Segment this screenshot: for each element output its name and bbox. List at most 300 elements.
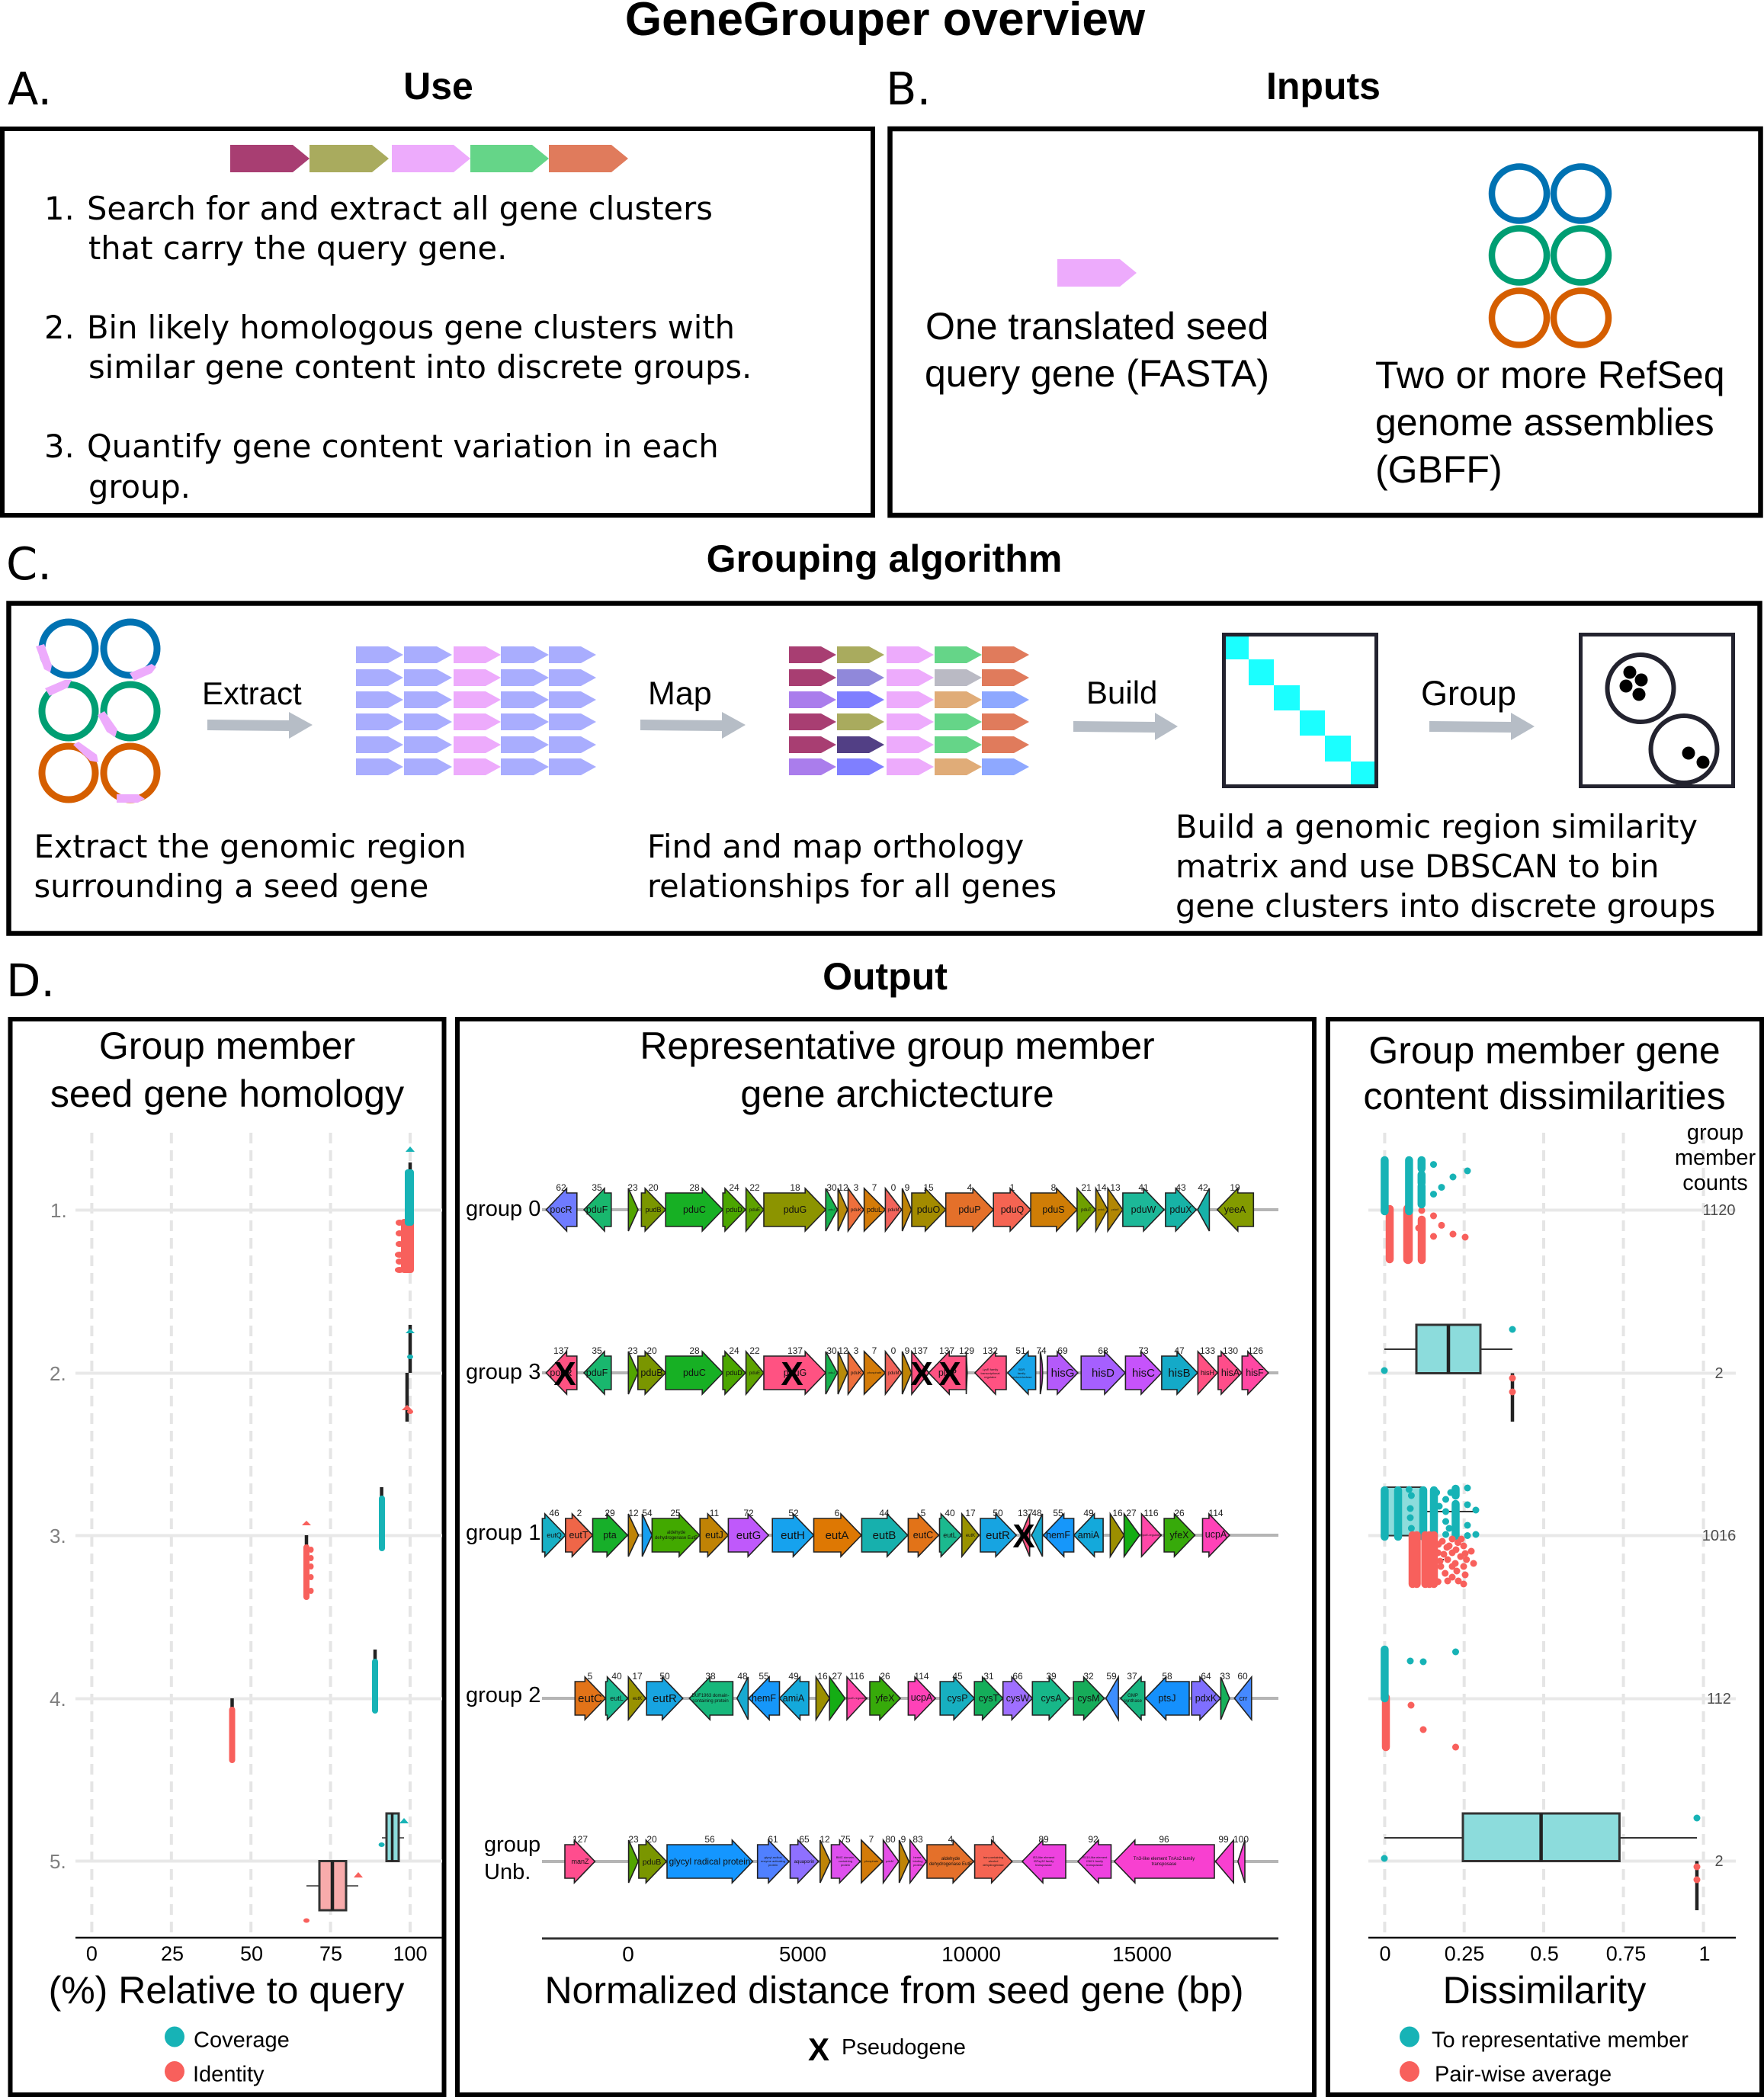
track: group Unb.: transposase [1035, 1863, 1053, 1867]
track: group 2: group 2 [466, 1683, 540, 1707]
track: group 1: eutH [781, 1529, 805, 1542]
track: group 0: 42 [1198, 1182, 1208, 1193]
panel letter C: C. [6, 537, 52, 590]
track: group 3: 0 [891, 1345, 896, 1356]
x axis [542, 1938, 1278, 1966]
panel frame [1328, 1019, 1762, 2095]
y axis labels: 4. [50, 1688, 66, 1711]
track: group 3: hisH [1201, 1369, 1214, 1377]
track: group 0: pduJ [829, 1207, 835, 1211]
track: group 2: eutK [633, 1697, 642, 1701]
track: group 3: pduC [683, 1368, 706, 1378]
track: group 1: 29 [605, 1508, 615, 1518]
track: group 1: eutL [943, 1531, 957, 1539]
gene grid: mapped [789, 646, 1029, 775]
group member counts heading: member [1675, 1146, 1756, 1170]
pseudogene marker: X [1012, 1518, 1035, 1555]
genome assemblies text: (GBFF) [1375, 448, 1503, 491]
track: group Unb.: 7 [869, 1834, 874, 1845]
track: group Unb.: transposase [1152, 1862, 1177, 1867]
track: group 0: 1 [1010, 1182, 1015, 1193]
track: group 2: cysA [1041, 1693, 1062, 1704]
track: group 2: ucpA [911, 1692, 933, 1703]
track: group 1: pta [603, 1530, 617, 1541]
icon: seed gene arrow [1057, 259, 1137, 287]
track: group 2: crr [1240, 1695, 1247, 1702]
track: group 0: pduV [1111, 1207, 1119, 1211]
panel title: gene archictecture [740, 1073, 1054, 1115]
y axis labels: 2. [50, 1362, 66, 1385]
track: group 3: 132 [983, 1345, 998, 1356]
track: group 1: 27 [1126, 1508, 1137, 1518]
track: group 0: 4 [967, 1182, 973, 1193]
track: group 0: 30 [826, 1182, 837, 1193]
track: group 3: hisA [1221, 1368, 1240, 1378]
track: group 3: LysR family [983, 1368, 998, 1371]
track: group Unb.: IS621 family [1086, 1859, 1103, 1863]
track: group 0: pduQ [1001, 1204, 1025, 1215]
track: group 2: 31 [983, 1671, 994, 1682]
track: group 2: 116 [849, 1671, 864, 1682]
track: group 0: 20 [648, 1182, 659, 1193]
track: group 3: 137 [912, 1345, 928, 1356]
track: group 1: 25 [670, 1508, 681, 1518]
steps text: similar gene content into discrete groups. [88, 348, 752, 386]
track: group Unb.: 96 [1159, 1834, 1169, 1845]
track: group 0: group 0 [466, 1197, 540, 1221]
track: group 3: hisD [1092, 1367, 1115, 1380]
track: group 0: pduM [887, 1208, 900, 1213]
track: group 3: 9 [905, 1345, 910, 1356]
track: group 3: 73 [1138, 1345, 1149, 1356]
x axis: 15000 [1112, 1942, 1172, 1966]
caption: build and group [1175, 808, 1715, 925]
track: group Unb.: protein [913, 1863, 922, 1867]
track: group 0: 12 [838, 1182, 848, 1193]
track: group 1: 12 [628, 1508, 639, 1518]
heading: Grouping algorithm: Grouping algorithm [707, 537, 1062, 580]
track: group 1: group 1 [466, 1521, 540, 1545]
track: group Unb.: IS3-like element [1033, 1855, 1055, 1859]
track: group 2: 38 [705, 1671, 716, 1682]
dissimilarity data: group 1 [1384, 1160, 1471, 1260]
panel B: inputs [886, 63, 1761, 515]
caption: map: Find and map orthology [647, 828, 1024, 865]
track: group 1: 2 [577, 1508, 582, 1518]
pseudogene markers: X [910, 1355, 933, 1393]
group member counts heading [1675, 1121, 1756, 1195]
track: group 3: 22 [749, 1345, 760, 1356]
track: group 2: 26 [880, 1671, 890, 1682]
track: group Unb.: group [484, 1832, 540, 1857]
track: group 1: 5 [921, 1508, 926, 1518]
caption: extract: Extract the genomic region [34, 828, 467, 865]
track: group Unb.: 80 [885, 1834, 896, 1845]
track: group 3: hisB [1168, 1367, 1191, 1380]
track: group 3: 30 [826, 1345, 837, 1356]
track: group 1: hemF [1046, 1530, 1070, 1541]
arrow: build [1073, 713, 1178, 740]
track: group 0: pduW [1131, 1204, 1156, 1215]
track: group 0: 22 [749, 1182, 760, 1193]
track: group 0: pduT [1081, 1208, 1092, 1213]
track: group 0: 7 [872, 1182, 877, 1193]
track: group 2: 48 [737, 1671, 748, 1682]
track: group 1: eutG [736, 1529, 761, 1542]
track: group 2: 50 [659, 1671, 670, 1682]
panel title: Representative group member [640, 1024, 1155, 1067]
track: group 0: 21 [1081, 1182, 1092, 1193]
track: group 2: 17 [632, 1671, 643, 1682]
track: group 0: 18 [790, 1182, 800, 1193]
track: group Unb.: 127 [572, 1834, 588, 1845]
track: group 0: pduO [917, 1204, 941, 1215]
track: group 1: 17 [965, 1508, 976, 1518]
track: group 1: eutT [569, 1530, 589, 1541]
dissimilarity data: group 3 [1384, 1485, 1479, 1587]
x axis: 100 [393, 1942, 428, 1965]
track: group 0: 24 [729, 1182, 739, 1193]
track: group 3: pduD [726, 1369, 742, 1377]
member count values: 112 [1707, 1691, 1731, 1707]
track: group Unb.: manZ [571, 1858, 589, 1865]
track: group 0: pduF [586, 1204, 608, 1215]
track: group 1: eutA [826, 1529, 848, 1542]
track: group Unb.: aquaporin [794, 1860, 814, 1865]
track: group 1: 54 [642, 1508, 653, 1518]
legend: Coverage [194, 2028, 290, 2052]
track: group 0: pudB [645, 1206, 662, 1214]
track: group 3: 68 [1098, 1345, 1108, 1356]
track: group 2: DUF1963 domain- [691, 1694, 730, 1698]
track: group 3: 20 [646, 1345, 657, 1356]
panel C: grouping algorithm [6, 537, 1759, 933]
track: group 2: amiA [783, 1693, 805, 1704]
x axis: 0.75 [1606, 1942, 1646, 1965]
track: group 2: 5 [588, 1671, 593, 1682]
track: group 2: 39 [1046, 1671, 1057, 1682]
track: group 2: 27 [832, 1671, 842, 1682]
x axis: 10000 [941, 1942, 1001, 1966]
track: group 2: ptsJ [1159, 1693, 1175, 1704]
heading: Use: Use [403, 65, 473, 107]
caption: map: relationships for all genes [647, 867, 1057, 905]
arrow label: Map: Map [648, 675, 712, 712]
track: group Unb.: Unb. [484, 1860, 531, 1884]
x axis: 25 [161, 1942, 184, 1965]
track: group 3: group 3 [466, 1360, 540, 1384]
track: group 1: 52 [788, 1508, 799, 1518]
panel A: use [2, 63, 873, 515]
track: group 0: pduD [726, 1206, 742, 1214]
track: group 2: 16 [817, 1671, 828, 1682]
track: group Unb.: 83 [912, 1834, 923, 1845]
track: group Unb.: 61 [768, 1834, 778, 1845]
track: group 0: 15 [923, 1182, 934, 1193]
track: group 1: amiA [1078, 1530, 1100, 1541]
track: group 1: 50 [993, 1508, 1003, 1518]
member count values: 2 [1714, 1365, 1724, 1382]
track: group 0: pduL [867, 1206, 882, 1214]
homology data: group 3 [302, 1487, 385, 1600]
track: group 1: ucpA [1205, 1529, 1227, 1540]
track: group 0: yeeA [1224, 1204, 1246, 1215]
genome assemblies text: genome assemblies [1375, 401, 1714, 444]
legend: Pair-wise average [1435, 2063, 1612, 2087]
track: group Unb.: pduB [643, 1858, 661, 1867]
track: group 0: pduP [958, 1204, 981, 1215]
track: group 3: 28 [689, 1345, 700, 1356]
track: group 2: eutC [578, 1692, 602, 1705]
track: group Unb.: transposase [1086, 1863, 1104, 1867]
track: group Unb.: IS110-like element [1082, 1855, 1108, 1859]
track: group Unb.: containing [839, 1859, 852, 1863]
arrow label: Extract: Extract [202, 675, 302, 711]
track: group 2: 58 [1162, 1671, 1172, 1682]
panel title [640, 1024, 1155, 1115]
track: group 3: oxidoreductase [1011, 1375, 1032, 1379]
track: group Unb.: glycyl-radical [764, 1855, 782, 1859]
track: group 1: 46 [549, 1508, 560, 1518]
track: group 1: 6 [835, 1508, 840, 1518]
x axis: 0.25 [1445, 1942, 1484, 1965]
heading: Output: Output [823, 955, 948, 998]
track: group 3: pduE [749, 1371, 760, 1376]
track: group 0: 35 [592, 1182, 602, 1193]
track: group Unb.: 1 [991, 1834, 996, 1845]
seed gene text: query gene (FASTA) [925, 352, 1269, 395]
genome assemblies text [1375, 354, 1725, 491]
track: group 1: 55 [1053, 1508, 1063, 1518]
track: group 0 [466, 1182, 1278, 1231]
track: group 0: pduE [749, 1208, 760, 1213]
track: group 0: 43 [1175, 1182, 1186, 1193]
caption: extract [34, 828, 467, 905]
track: group 3: 69 [1057, 1345, 1068, 1356]
group member counts heading: counts [1682, 1171, 1748, 1195]
track: group 2: 40 [611, 1671, 622, 1682]
track: group 1: 116 [1143, 1508, 1159, 1518]
track: group 1: 49 [1083, 1508, 1094, 1518]
track: group 3: 137 [553, 1345, 569, 1356]
x axis [75, 1938, 442, 1965]
member count values: 1016 [1702, 1528, 1736, 1544]
x axis: 0 [1379, 1942, 1391, 1965]
legend: pseudogene: X [808, 2031, 829, 2067]
pseudogene markers: X [938, 1355, 961, 1393]
panel D3: dissimilarities [1328, 1019, 1762, 2095]
track: group 3: plsP [938, 1368, 957, 1378]
x axis: 0 [622, 1942, 634, 1966]
arrow label: Build: Build [1086, 675, 1157, 710]
track: group Unb. [484, 1832, 1278, 1884]
track: group 2: containing protein [692, 1699, 729, 1704]
legend: pseudogene [808, 2031, 966, 2067]
arrow label: Group: Group [1421, 674, 1516, 713]
icon: genome circles [1492, 166, 1608, 345]
track: group 3: 129 [959, 1345, 974, 1356]
track: group 1: eutK [966, 1534, 975, 1538]
pseudogene markers: X [553, 1355, 576, 1393]
y axis labels: 3. [50, 1525, 66, 1547]
dissimilarity data: group 5 [1381, 1813, 1700, 1910]
track: group Unb.: 99 [1218, 1834, 1229, 1845]
track: group 3: hisG [1051, 1367, 1074, 1380]
track: group 3: phosphate [868, 1371, 882, 1374]
track: group 0: 19 [1230, 1182, 1240, 1193]
track: group 0: pduC [683, 1204, 706, 1215]
track: group 3 [466, 1345, 1278, 1394]
homology data: group 5 boxplots [303, 1813, 409, 1922]
track: group Unb.: protein [841, 1863, 850, 1867]
track: group 2 [466, 1671, 1278, 1720]
cluster plot [1581, 634, 1734, 787]
track: group Unb.: iron-containing [983, 1855, 1003, 1859]
track: group 3: 23 [627, 1345, 638, 1356]
track: group 2: pdxK [1195, 1693, 1217, 1704]
track: group 1: 26 [1174, 1508, 1185, 1518]
track: group Unb.: 4 [948, 1834, 954, 1845]
track: group 1: 137 [1018, 1508, 1033, 1518]
track: group Unb.: 20 [646, 1834, 657, 1845]
track: group 1: 16 [1112, 1508, 1123, 1518]
legend: Identity [193, 2063, 265, 2087]
track: group 3: family [1018, 1371, 1025, 1375]
panel letter A: A. [8, 63, 52, 115]
track: group 0: 41 [1138, 1182, 1149, 1193]
similarity matrix [1224, 634, 1377, 787]
steps text: 3. [44, 428, 75, 465]
track: group 2: RpoE-regulated [846, 1696, 868, 1700]
track: group 1: 44 [879, 1508, 890, 1518]
track: group 1: eutB [873, 1529, 896, 1542]
track: group 0: 14 [1096, 1182, 1107, 1193]
track: group 1: dehydrogenase EutE [655, 1536, 698, 1541]
track: group Unb.: Tn3-like element TnAs2 family [1134, 1857, 1195, 1861]
panel C frame [9, 604, 1759, 933]
track: group 3: 133 [1200, 1345, 1215, 1356]
track: group 3: pduM [887, 1371, 900, 1376]
track: group 3: pduB [640, 1368, 663, 1378]
track: group 3: hisF [1246, 1368, 1264, 1378]
steps text: Search for and extract all gene clusters [87, 190, 713, 227]
panel D1: seed gene homology [11, 1019, 444, 2095]
track: group Unb.: heme- [913, 1855, 922, 1859]
track: group Unb.: 23 [628, 1834, 639, 1845]
track: group 3: 130 [1223, 1345, 1238, 1356]
x axis: 0 [86, 1942, 98, 1965]
panel title: Group member [99, 1024, 355, 1067]
track: group 1: RpoE-regulated [1140, 1533, 1162, 1537]
track: group Unb.: BMC domain- [836, 1855, 855, 1859]
track: group Unb.: 65 [799, 1834, 810, 1845]
y axis labels [50, 1199, 67, 1873]
seed gene text [925, 305, 1269, 395]
x axis title: Dissimilarity [1443, 1969, 1646, 2012]
x axis [1368, 1938, 1736, 1965]
track: group 3: regulator [984, 1375, 997, 1379]
track: group 2: 32 [1083, 1671, 1094, 1682]
track: group Unb.: 56 [704, 1834, 715, 1845]
y axis labels: 1. [50, 1199, 67, 1222]
x axis: 75 [319, 1942, 342, 1965]
track: group 3: pocR [550, 1368, 572, 1378]
steps text: 2. [44, 309, 75, 346]
track: group 0: 13 [1110, 1182, 1121, 1193]
panel D2: gene architecture [457, 1019, 1314, 2095]
track: group 1: eutR [986, 1529, 1010, 1542]
track: group 0: 9 [905, 1182, 910, 1193]
member count values [1702, 1202, 1736, 1870]
gene cluster arrows [230, 145, 628, 172]
track: group 3: 3 [854, 1345, 859, 1356]
track: group 0: pduS [1042, 1204, 1065, 1215]
arrow: extract [207, 712, 313, 739]
track: group 0: 28 [689, 1182, 700, 1193]
track: group 3: 137 [939, 1345, 954, 1356]
arrow: group [1429, 713, 1535, 740]
track: group 0: pduU [1098, 1207, 1105, 1211]
x axis: 0.5 [1530, 1942, 1559, 1965]
track: group 2: eutR [653, 1692, 677, 1705]
track: group 3: 126 [1248, 1345, 1263, 1356]
track: group 2: 37 [1127, 1671, 1137, 1682]
track: group Unb.: dehydrogenase EutE [929, 1862, 972, 1867]
track: group 2: 59 [1106, 1671, 1117, 1682]
track: group 0: pduX [1169, 1204, 1192, 1215]
legend [1400, 2026, 1689, 2087]
track: group 1: yfeX [1169, 1530, 1189, 1541]
steps text [44, 190, 752, 505]
track: group 2: cysW [1006, 1693, 1029, 1704]
caption: build and group: Build a genomic region similarity [1175, 808, 1698, 845]
track: group Unb.: alcohol [989, 1859, 998, 1863]
track: group 1: 48 [1031, 1508, 1042, 1518]
y axis labels: 5. [50, 1850, 66, 1873]
x axis: 50 [240, 1942, 263, 1965]
track: group 2: 66 [1012, 1671, 1023, 1682]
gene grid: extracted [356, 646, 596, 775]
track: group 0: 0 [891, 1182, 896, 1193]
track: group 2: 64 [1201, 1671, 1211, 1682]
panel title [1363, 1029, 1726, 1117]
track: group Unb.: glycyl radical protein [669, 1856, 750, 1867]
legend [165, 2026, 290, 2087]
icon: genomes with seed genes [36, 622, 157, 803]
homology data: group 1 [395, 1146, 415, 1273]
track: group 1: 72 [743, 1508, 754, 1518]
panel B frame [890, 129, 1761, 515]
track: group Unb.: binding [913, 1859, 922, 1863]
group member counts heading: group [1687, 1121, 1743, 1145]
panel title: seed gene homology [50, 1073, 404, 1115]
member count values: 2 [1714, 1853, 1724, 1870]
steps text: that carry the query gene. [88, 229, 507, 267]
track: group 2: cysP [947, 1693, 968, 1704]
track: group 3: 24 [729, 1345, 739, 1356]
track: group Unb.: enzyme activating [761, 1859, 785, 1863]
pseudogene markers: X [781, 1355, 803, 1393]
track: group 3: SDR [1018, 1368, 1025, 1371]
track: group 1 [466, 1508, 1278, 1557]
track: group 1: eutC [913, 1530, 933, 1541]
track: group 2: 45 [952, 1671, 963, 1682]
track: group 3: 47 [1174, 1345, 1185, 1356]
track: group 3: pduJ [829, 1371, 835, 1374]
panel A frame [2, 129, 873, 515]
track: group Unb.: 12 [819, 1834, 830, 1845]
track: group 1: 11 [710, 1508, 720, 1518]
